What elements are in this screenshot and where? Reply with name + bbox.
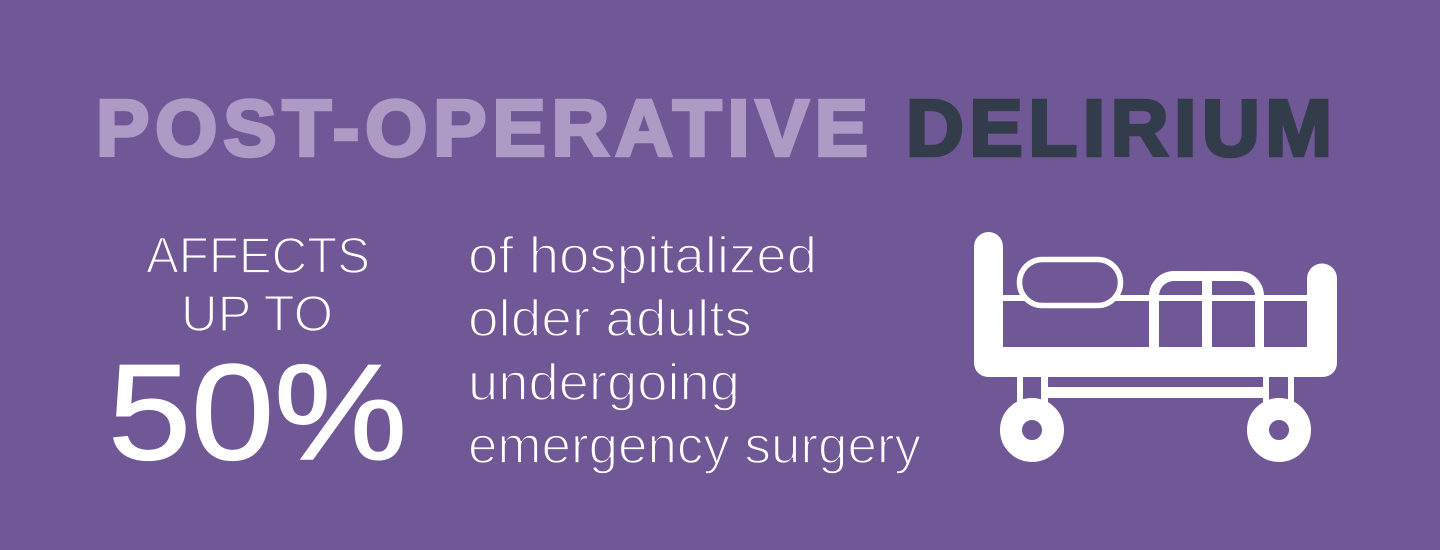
side guard bbox=[1149, 271, 1264, 350]
line 2: older adults bbox=[468, 290, 752, 348]
right wheel bbox=[1258, 409, 1300, 451]
line 3: undergoing bbox=[468, 354, 740, 412]
description text bbox=[468, 227, 921, 475]
bed frame bbox=[974, 232, 1337, 377]
up to label: UP TO bbox=[181, 285, 333, 342]
left wheel bbox=[1011, 409, 1053, 451]
mattress rail bbox=[1000, 295, 1310, 301]
affects label: AFFECTS bbox=[146, 227, 370, 284]
title: post-operative: POST-OPERATIVE bbox=[96, 84, 868, 172]
legs and crossbar bbox=[1017, 375, 1294, 405]
icon: hospital bed bbox=[974, 232, 1337, 451]
line 4: emergency surgery bbox=[468, 417, 921, 475]
title bbox=[96, 84, 1332, 172]
statistic: affects up to 50% bbox=[108, 227, 407, 488]
line 1: of hospitalized bbox=[468, 227, 817, 285]
title: delirium: DELIRIUM bbox=[906, 84, 1332, 172]
50 percent figure: 50% bbox=[108, 336, 407, 488]
pillow bbox=[1020, 260, 1120, 306]
